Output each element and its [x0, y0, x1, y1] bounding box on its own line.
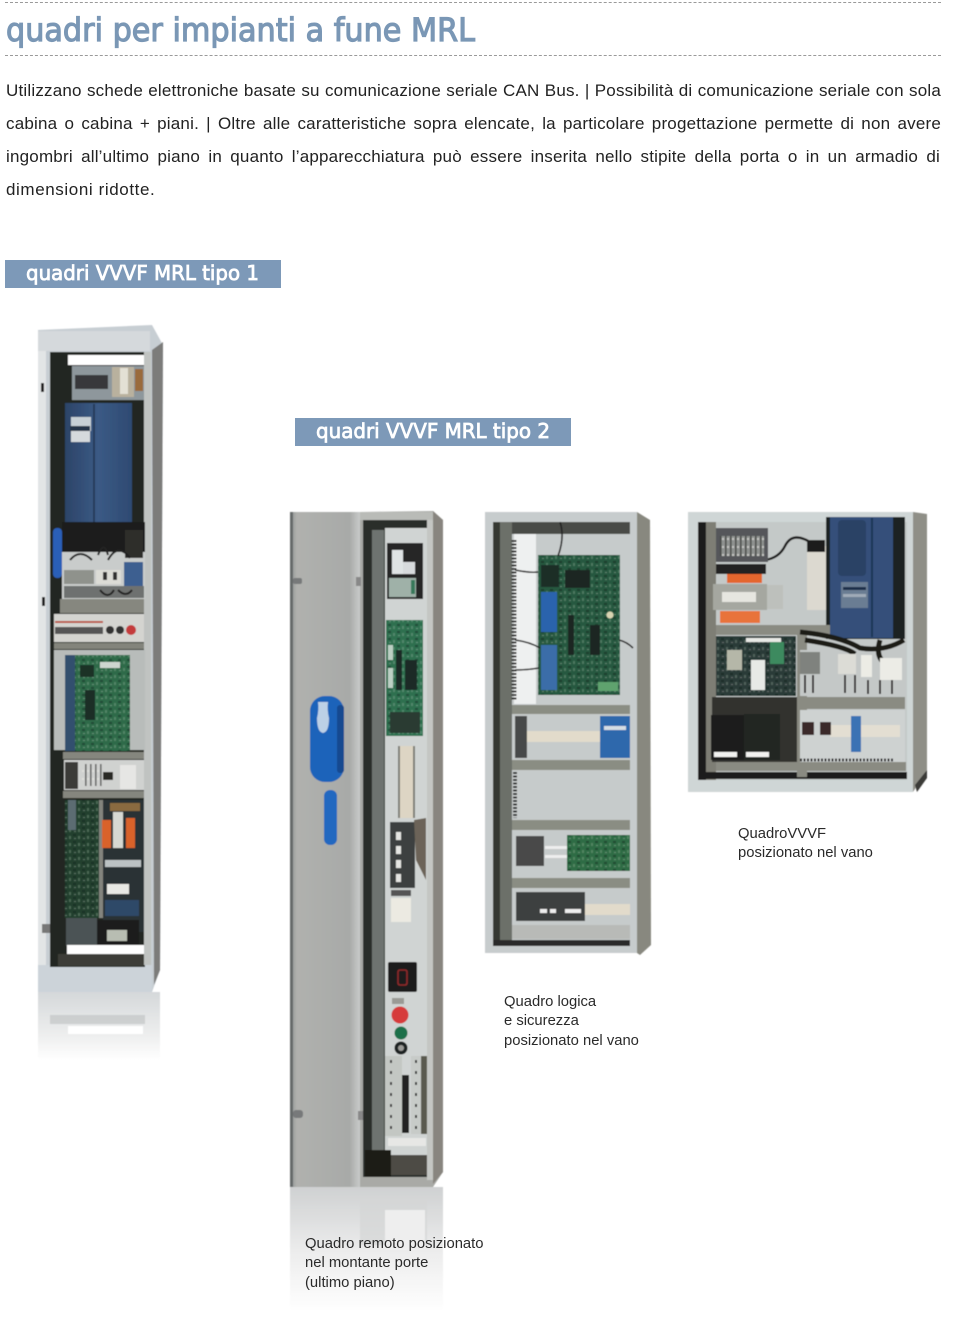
shell [485, 512, 651, 955]
control board and batteries [711, 636, 797, 762]
terminal block [512, 892, 630, 939]
blue cable strip [53, 528, 62, 578]
inverter [826, 517, 905, 639]
shelf and terminals [63, 752, 144, 798]
intro text block: Utilizzano schede elettroniche basate su comunicazione seriale CAN Bus. | Possibilità di comunicazione seriale con sola [6, 81, 941, 100]
icon: blue telephone [310, 696, 344, 845]
caption: quadro logica: posizionato nel vano [504, 1033, 639, 1049]
shelves [512, 705, 630, 888]
heading band: tipo 1: quadri VVVF MRL tipo 1 [26, 261, 259, 285]
floor display [388, 962, 417, 992]
panel: logic and safety panel [485, 512, 651, 955]
caption: quadro logica: e sicurezza [504, 1013, 579, 1029]
control board [54, 650, 145, 751]
caption: quadro VVVF: QuadroVVVF [738, 826, 826, 842]
caption: quadro remoto: Quadro remoto posizionato [305, 1236, 484, 1252]
lower board [516, 835, 630, 871]
inverter module [387, 543, 423, 599]
heading band: tipo 2: quadri VVVF MRL tipo 2 [316, 419, 550, 443]
filter module [765, 537, 826, 610]
terminals [716, 528, 768, 574]
lower dashed rule [5, 55, 941, 56]
caption: quadro remoto: (ultimo piano) [305, 1275, 395, 1291]
contactors [64, 548, 144, 598]
title: quadri per impianti a fune MRL [6, 11, 475, 49]
buttons [392, 998, 408, 1054]
intro text block [6, 81, 941, 199]
rail with blue terminals [515, 716, 630, 758]
reflection [38, 992, 160, 1060]
intro text block: dimensioni ridotte. [6, 180, 155, 199]
shelf and breakers [54, 599, 144, 649]
intro text block: ingombri all’ultimo piano in quanto l’apparecchiatura può essere inserita nello stipite della porta o in un armadio di [6, 147, 940, 166]
lower board and relays [58, 800, 144, 966]
empty comb [513, 772, 517, 818]
caption: quadro remoto [305, 1236, 484, 1291]
shell [688, 512, 927, 792]
divider shelves [716, 627, 906, 777]
caption: quadro VVVF: posizionato nel vano [738, 845, 873, 861]
wiring comb [512, 540, 516, 700]
green board [386, 620, 423, 736]
caption: quadro logica [504, 994, 639, 1049]
main board [515, 522, 633, 695]
contactors [800, 632, 905, 696]
panel: remote panel with open door [290, 511, 443, 1312]
transformer [713, 574, 830, 635]
cabinet body [360, 511, 443, 1187]
top dashed rule [5, 2, 941, 3]
caption: quadro logica: Quadro logica [504, 994, 596, 1010]
cabinet shell [38, 325, 163, 992]
lower rail [800, 710, 905, 762]
panel: VVVF panel in shaft [688, 512, 927, 792]
panel: VVVF tipo 1 cabinet photo [38, 325, 163, 1060]
intro text block: cabina o cabina + piani. | Oltre alle caratteristiche sopra elencate, la particolare progettazione permette di non avere [6, 114, 941, 133]
bottom base [365, 1150, 427, 1177]
reflection [290, 1187, 443, 1312]
caption: quadro VVVF [738, 826, 873, 861]
inverter [65, 403, 132, 522]
breakers [385, 1056, 427, 1146]
door [290, 512, 363, 1187]
interior [50, 352, 151, 967]
caption: quadro remoto: nel montante porte [305, 1255, 428, 1271]
hinges [41, 383, 50, 933]
rail and terminals [390, 746, 426, 922]
